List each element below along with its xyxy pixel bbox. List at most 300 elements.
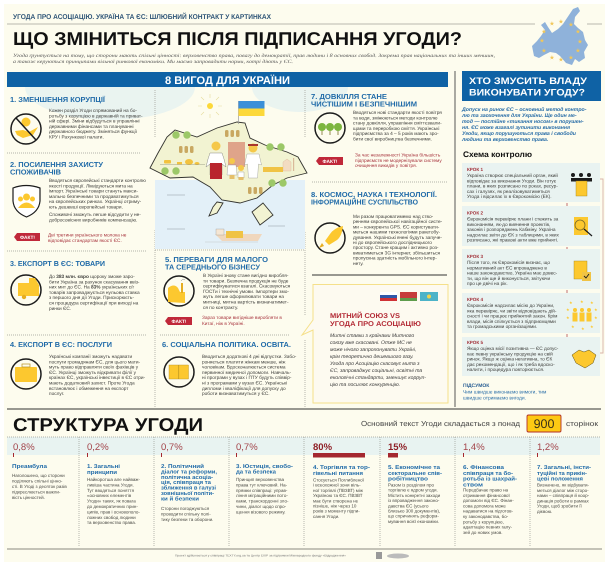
panel: step 3: про це двічі на рік. [467,281,508,287]
panel: benefit 3 goods export: ринки ЄС. [49,306,71,312]
panel: step 2: надсилає звіти до ЄК з таблицями, в яких [467,232,560,238]
intro: market access: ня. ЄС може взагалі зупинити виконання [462,125,570,131]
panel: benefit 7 environment: ЧИСТІШИМ І БЕЗПЕЧНІШИМ [311,100,417,108]
icon: shield with people [13,186,40,217]
panel: step 5: КРОК 5 [467,340,483,345]
callout: customs union vs association agreement: Митні ставки з країнами Митного [330,333,414,339]
column: final provisions: туційні та прикін- [537,470,587,477]
icon: magnifier [574,217,592,236]
icon: EU map with stars: ★ [558,18,564,26]
panel: benefit 2 consumers: Споживачі зможуть легше відсудити у не- [49,212,141,218]
panel: benefit 5 small business [164,255,291,327]
panel: benefit 8 space and science: ні до європейського дослідницького [353,240,432,246]
icon: briefcase [11,359,41,389]
column: final provisions: дієвою. [537,509,552,514]
panel: step 1: Угода і відсилає їх в Єврокомісію (ЕК). [467,194,552,200]
panel: step 2: виконанням, як-до вивчення проектів, [467,222,550,228]
intro: market access: людини та верховенство права. [461,137,548,143]
icon: sun [198,94,222,118]
column: economic cooperation: робітництво [388,476,429,483]
callout: 900 pages: Основний текст Угоди складається з понад [361,419,521,428]
column: trade: гівельні питання [313,470,363,477]
icon: people with stars [566,299,598,331]
callout: customs union vs association agreement: може нічого запропонувати Україні, [330,347,416,353]
column: justice: Принцип верховенства [236,477,284,482]
panel: benefit 8 space and science: ми – конкурента GPS. ЄС користувати- [353,224,440,230]
arrow [566,203,568,211]
panel: step 2: законів і розпоряджень Кабміну. Україна [467,227,556,233]
panel: benefit 4 services export: мають додатковий захист. Проте Угода [49,380,135,386]
panel: benefit 2 consumers: ють дешевші європейські товари. [49,204,123,210]
summary: ПІДСУМОК [463,383,490,389]
panel: benefit 4 services export: Українські компанії зможуть надавати [49,354,132,360]
callout: customs union vs association agreement: екологічні стандарти, зменшує корруп- [330,375,426,381]
column: financial cooperation: сова допомога може [463,503,506,508]
panel: benefit 4 services export: 4. ЕКСПОРТ В ЄС: ПОСЛУГИ [10,340,112,349]
panel: benefit 8 space and science: меться нашими технологіями ракетобу- [353,230,441,236]
panel: benefit 2 consumers: мально безпечними та продаватимуться [49,194,139,200]
column: final provisions: Угоди, щоб зробити її [537,504,582,509]
panel: step 4: яка перевіряє, чи звіти відповідають дій- [467,308,557,314]
panel: benefit 5 small business: митниці, митна вартість визначатимет- [203,300,289,306]
panel: benefit 2 consumers: 2. ПОСИЛЕННЯ ЗАХИСТУ [10,160,104,169]
panel: benefit 4 services export: країнах ЄС, українські інвестиції в ЄС отри- [49,375,146,381]
fact badge: ФАКТ! [172,319,187,325]
panel: benefit 6 social policy: роняється платити жінкам менше, ніж [202,359,286,365]
panel: benefit 1 corruption: Кожен розділ Угоди спрямований на бо- [49,108,137,114]
column: financial cooperation: ротьбу з корупцією, [463,519,504,524]
panel: benefit 7 environment [311,92,442,169]
panel: step 4: сності і чи працює прийнятий закон. Крім [467,314,557,320]
column: trade: ної торгівлі (ПВЗВТ) між [313,488,363,493]
panel: step 3 [462,249,600,289]
panel: step 4: Єврокомісія надсилає місію до України, [467,303,554,309]
panel: step 3: Після того, як Єврокомісія визнає, що [467,260,550,266]
column: preamble: Преамбула [12,463,48,470]
column: general principles: 0,2% [87,442,109,453]
icon: EU map with stars: ★ [541,48,547,54]
column: final provisions: цеві положення [537,476,583,483]
column: general principles: ципів, прав і основополо- [87,509,140,514]
icon: people with stars: ★ [594,315,598,320]
column: economic cooperation: близько 300 документів), [388,508,440,514]
icon: factory [263,158,294,172]
column: trade: Україною та ЄС. ПВЗВТ [313,493,363,498]
summary [463,383,547,402]
panel: step 2 [462,206,600,246]
panel: benefit 7 environment: За час незалежності Україна більшість [355,152,441,158]
icon: EU map with stars: ★ [568,22,574,28]
panel: benefit 7 environment: 7. ДОВКІЛЛЯ СТАНЕ [311,92,387,101]
column: political dialogue: ція, співпраця та [161,479,212,486]
fact badge: ФАКТ! [20,235,35,241]
panel: step 2: Єврокомісія перевіряє плани і стежить за [467,216,559,222]
column: trade: 4. Торгівля та тор- [313,464,370,471]
panel: benefit 7 environment: Вводяться нові стандарти якості повітря [353,110,442,116]
column: political dialogue: Сторони погоджуються [161,506,210,511]
column: economic cooperation: Разом із розділом про [388,482,434,488]
column: trade: і всеохожної зони віль- [313,483,361,488]
column: political dialogue: ки й безпеки [161,495,200,502]
column: final provisions: меться діалог між сторо- [537,488,589,493]
panel: benefit 6 social policy: дипломи і кваліфікації для допуску до [202,386,286,392]
decorative teal clouds [25,87,348,120]
column: financial cooperation: 1,4% [463,442,485,453]
intro text: а також керуються принципами вільної ринкової економіки. Ми маємо запровадити норми, котрі діють у ЄС. [13,59,293,65]
icon: handshake [572,350,596,368]
column: justice: права тут ключовий. На- [236,482,288,487]
column: financial cooperation: ку законодавства, бо- [463,514,509,519]
panel: benefit 2 consumers [10,160,146,244]
banner: 8 benefits [7,72,448,87]
panel: benefit 7 environment: та води, змінюються методи контролю [353,115,438,121]
column: preamble: Наголошено, що сторони [12,473,65,478]
panel: benefit 2 consumers: відповідає стандартам якості ЄС. [48,238,122,244]
panel: benefit 3 goods export: них мит до ЄС. На 83% українських с/г [49,286,134,291]
icon: EU map with stars: ★ [549,54,555,62]
column: financial cooperation: ством [463,482,483,488]
column: political dialogue [161,442,217,522]
column: preamble: сті. В Угоді з десяток разів [12,484,67,489]
column: justice [236,442,293,514]
callout: 900 pages [361,415,599,432]
column: justice: прямки співпраці: управ- [236,488,288,493]
panel: benefit 1 corruption: державними фінансами та плануванні [49,124,134,130]
panel: benefit 3 goods export: ся процедура сертифікації при виході на [49,300,139,306]
column: justice: да та безпека [236,468,277,476]
panel: benefit 8 space and science: нету. [353,262,364,267]
panel: benefit 6 social policy [162,340,297,397]
panel: benefit 2 consumers: СПОЖИВАЧІВ [10,168,61,176]
icon: factory [164,276,194,306]
icon: EU map with stars: ★ [558,56,564,64]
map illustration of Ukraine [150,94,307,249]
panel: step 1: Україна створює спеціальний орган, який [467,173,558,179]
icon: family [206,142,262,180]
panel: step 4: КРОК 4 [467,297,483,302]
column: economic cooperation: давства ЄС (усього [388,503,429,508]
panel: benefit 8 space and science: простору. Стане кращим і активно роз- [353,245,439,251]
column: financial cooperation: адаптацію певних галу- [463,525,513,530]
panel: step 5: дає рекомендації, що і як треба вдоско- [467,362,555,368]
panel: benefit 8 space and science [311,190,443,267]
column: general principles: та верховенство права. [87,520,136,525]
column: political dialogue: 2. Політичний [161,463,205,470]
panel: benefit 5 small business: 5. ПЕРЕВАГИ ДЛЯ МАЛОГО [165,255,268,264]
strip for percent row [7,437,600,455]
icon: people and document [571,173,592,196]
panel: step 3: КРОК 3 [467,254,483,259]
panel: benefit 4 services export: встановлює і обмеження на експорт [49,386,129,392]
panel: benefit 5 small business: сертифікуватися взагалі. Скасовуються [203,284,291,290]
column: trade: сання Угоди. [313,514,339,519]
panel: benefit 6 social policy: ні програми у вузах і ПТУ будуть співвір- [202,375,292,381]
panel: step 5: кає певну українську продукцію на свій [467,351,553,357]
column: justice: щення візового режиму. [236,509,286,514]
column: financial cooperation: допомоги від ЄС. Фінан- [463,498,514,503]
icon: EU map with stars: ★ [539,38,545,44]
icon: people with stars: ★ [580,299,584,304]
icon: people with stars: ★ [569,300,573,305]
callout: 900 pages: сторінок [566,419,599,428]
arrow [566,247,568,254]
panel: step 4: та громадськими організаціями. [467,324,537,330]
panel: step 1: КРОК 1 [467,167,483,172]
icon: EU map with stars: ★ [549,20,555,28]
panel: step 1: плани, в яких розписано по роках, ресур- [467,185,558,190]
title: ЩО ЗМІНИТЬСЯ ПІСЛЯ ПІДПИСАННЯ УГОДИ? [13,28,462,49]
icon: people with stars: ★ [581,326,585,331]
icon: EU map with stars: ★ [568,54,574,62]
icon: wheat [179,130,262,194]
icon: people with stars: ★ [566,307,570,312]
icon: book [164,357,194,387]
panel: benefit 8 space and science: ІНФОРМАЦІЙНЕ СУСПІЛЬСТВО [311,198,418,206]
arrow [566,334,568,342]
panel: benefit 8 space and science: виватиметься 3G інтернет, збільшиться [353,250,440,256]
panel: benefit 1 corruption: КРУ і Рахункової палати. [49,134,104,140]
panel: step 2: КРОК 2 [467,210,483,216]
waves [167,195,285,229]
column: political dialogue: діалог та реформи, [161,468,217,475]
column: final provisions: динація роботи в рамках [537,498,590,503]
panel: benefit 6 social policy: 6. СОЦІАЛЬНА ПОЛІТИКА. ОСВІТА. [162,340,291,349]
column: general principles: Угоди» таких, як повага [87,499,136,504]
panel: benefit 1 corruption: ротьбу з корупцією в державній та приват- [49,113,143,119]
panel: benefit 4 services export: муть право відправляти своїх фахівців у [49,365,139,371]
icon: people with stars: ★ [590,324,594,329]
panel: benefit 8 space and science: пропускна здатність мобільного інтер- [353,256,437,262]
panel: benefit 1 corruption: державного бюджету. Зміняться функції [49,129,138,135]
panel: benefit 6 social policy: первинної медичної допомоги. Навчаль- [202,370,291,376]
flags [380,292,438,301]
panel: benefit 4 services export: послуг. [49,392,64,397]
column: trade: має бути створена не [313,498,359,503]
icon: trees [161,131,287,187]
column: financial cooperation: отримання фінансової [463,493,511,498]
column: financial cooperation: ротьба із шахрай- [463,476,517,483]
column: financial cooperation: 6. Фінансова [463,464,505,471]
column: justice: 0,7% [236,442,258,453]
column: preamble: вість цінностей. [12,495,45,500]
icon: people with stars: ★ [566,315,570,320]
intro: market access: лю та заохочення для України. Ще один ме- [461,113,577,119]
icon: EU map with stars [532,7,588,65]
panel: benefit 2 consumers: добросовісних виробників компенсацію. [49,217,137,223]
callout: customs union vs association agreement: ЄС, запроваджує соціальні, освітні та [330,368,422,374]
panel: benefit 3 goods export: бити Україна за рахунок скасування ввіз- [49,279,140,285]
icon: document with check [574,261,591,281]
column: economic cooperation: торгівлю є ядром угоди. [388,488,438,493]
icon: cargo ship [205,229,262,242]
column: final provisions [537,442,591,514]
panel: benefit 2 consumers: якості продукції. Ліквідуються мита на [49,183,133,189]
footer credit [175,552,409,559]
fact badge: ФАКТ! [322,159,338,165]
callout: customs union vs association agreement: УГОДА ПРО АСОЦІАЦІЮ [330,321,421,328]
icon: people with stars: ★ [590,300,594,305]
panel: benefit 4 services export [10,340,146,397]
banner: who will force the authorities: ВИКОНУВАТИ УГОДУ? [469,88,585,98]
column: general principles: ливіша частина Угоди. [87,482,134,487]
panel: step 1: відповідає за виконання Угоди. Він готує [467,178,557,184]
column: preamble [12,442,67,500]
callout: customs union vs association agreement: крім теоретично дешевшого газу. [330,354,414,360]
panel: benefit 3 goods export: 3. ЕКСПОРТ В ЄС: ТОВАРИ [10,259,105,268]
panel: benefit 5 small business: ГОСТи і технічні умови. Імпортери змо- [203,289,289,295]
heading: control scheme: Схема контролю [463,150,532,159]
column: justice: ління міграційними пото- [236,493,288,498]
panel: benefit 7 environment: очищення викидів у повітря. [355,163,417,169]
icon: building [228,142,245,167]
panel: benefit 6 social policy: чоловікам. Вдосконалюється система [202,365,286,371]
column: trade: 80% [313,442,333,453]
column: final provisions: Визначено, як відбувати- [537,482,590,488]
panel: step 5: налити, і процедура повторюється. [467,367,544,373]
panel: benefit 5 small business: Китаї, ніж в Україні. [202,321,245,327]
panel: benefit 3 goods export: з першого дня дії Угоди. Прискорюєть- [49,295,134,301]
column: financial cooperation: зей до нових умов. [463,530,502,535]
panel: benefit 4 services export: послуги громадянам ЄС, для цього мати- [49,359,141,365]
column: preamble: підкреслюється важли- [12,490,61,494]
column: financial cooperation: співпраця та бо- [463,470,513,477]
panel: benefit 3 goods export: товарів запроваджується нульова ставка [49,290,140,296]
icon: bribe crossed [11,114,41,144]
panel: benefit 6 social policy: Вводиться додаткові 4 дні відпустки. Забо- [202,354,297,360]
column: justice: 3. Юстиція, свобо- [236,463,293,470]
column: justice: ками, транскордонні зло- [236,499,289,504]
panel: benefit 5 small business: жуть легше оформлювати товари на [203,294,284,300]
panel: benefit 1 corruption: 1. ЗМЕНШЕННЯ КОРУПЦІЇ [10,95,106,104]
icon: Ukrainian flag [238,101,264,124]
callout: customs union vs association agreement [302,284,448,403]
icon: trees [315,113,345,143]
column: economic cooperation: що спричинять реформ- [388,514,439,519]
panel: benefit 2 consumers: на європейських ринках. Українці отриму- [49,199,142,205]
callout: customs union vs association agreement: союзу вже скасовані. Отже МС не [330,340,412,346]
panel: step 5 [462,337,600,376]
panel: benefit 7 environment: стану довкілля, управління сміттєзвали- [353,121,442,127]
column: economic cooperation: із впровадження законо- [388,498,440,503]
column: trade: Стосується Поглибленої [313,478,365,482]
icon: people with stars: ★ [594,307,598,312]
column: political dialogue: 0,7% [161,442,183,453]
panel: step 1: сах і галузях, як реалізовуватиметься [467,189,550,195]
banner: who will force the authorities [462,71,601,101]
panel: benefit 7 environment: бити свої виробництва безпечними. [353,136,432,142]
panel: benefit 3 goods export: До 383 млн. євро щороку зможе заро- [49,275,135,280]
column: economic cooperation: 5. Економічне та [388,464,441,471]
column: trade: років з моменту підпи- [313,509,360,514]
feedback line [600,179,603,353]
column: political dialogue: зовнішньої політи- [161,490,214,497]
panel: step 3: нормативний акт ЄС впроваджено в [467,265,547,271]
panel: benefit 3 goods export [10,259,140,312]
column: general principles: Найкоротша але найваж- [87,477,140,482]
panel: benefit 2 consumers: імпорт. Українські товари стануть макси- [49,189,138,195]
callout: customs union vs association agreement: МИТНИЙ СОЮЗ VS [330,311,400,320]
icon: truck [11,275,41,305]
heading: agreement structure: СТРУКТУРА УГОДИ [13,414,203,435]
column: preamble: поділяють спільні цінно- [12,478,63,484]
summary: Чим швидше виконаємо вимоги, тим [463,390,547,396]
column: financial cooperation: Передбачає право на [463,488,509,492]
panel: benefit 7 environment: щами та переробкою сміття. Українські [353,126,439,132]
panel: benefit 5 small business: Зараз товари вигідніше виробляти в [202,315,282,321]
column: final provisions: нами – співпраця й коор- [537,493,590,498]
icon: EU map with stars: ★ [575,48,581,54]
intro text: Угода ґрунтується на тому, що сторони мають спільні цінності: верховенство права, повагу до демократії, прав людини і 8 основних свобод. Зокрема прав національних та інших меншин, [13,53,495,59]
panel: step 3: ти, що він ще й виконується, звітуючи [467,276,550,282]
column: political dialogue: політична асоціа- [161,474,213,481]
column: financial cooperation: надаватися на підготов- [463,509,514,514]
panel: step 4 [462,293,600,333]
panel: benefit 2 consumers: Дві третини українського молока не [48,232,127,238]
banner: 8 benefits: 8 ВИГОД ДЛЯ УКРАЇНИ [165,74,290,87]
panel: benefit 5 small business: ТА СЕРЕДНЬОГО БІЗНЕСУ [165,262,261,272]
column: trade: пізніше, ніж через 10 [313,504,357,508]
column: general principles: принципи [87,470,118,476]
panel: benefit 7 environment: підприємств не модернізували систему [355,158,442,164]
column: general principles: до демократичних прин- [87,504,138,509]
panel: benefit 2 consumers: Вводяться європейські стандарти контролю [49,178,146,184]
icon: EU map with stars: ★ [577,38,583,46]
intro: market access: Допуск на ринок ЄС – основний метод контро- [461,107,587,113]
panel: benefit 5 small business: ся по контракту. [203,306,238,311]
panel: benefit 1 corruption [10,95,143,144]
header kicker: УГОДА ПРО АСОЦІАЦІЮ. УКРАЇНА ТА ЄС: ШЛЮБНИЙ КОНТРАКТ У КАРТИНКАХ [13,12,271,21]
panel: benefit 5 small business: ти товари. Безпечна продукція не буде [203,278,289,284]
icon: EU map with stars: ★ [541,28,547,36]
column: economic cooperation: мування всієї економіки. [388,519,439,524]
column: political dialogue: тику безпеки та оборони. [161,517,213,522]
column: general principles: Тут вводяться поняття [87,488,135,493]
panel: step 5: Якщо оцінка місії позитивна — ЄС допус- [467,346,559,352]
column: justice: чини, діалог щодо спро- [236,504,287,509]
panel: step 4: влади, місія спілкується з підприємцями [467,319,556,325]
panel: step 3: наше законодавство, Україна має довес- [467,271,558,277]
column: preamble: 0,8% [13,442,35,453]
summary: швидше отримаємо вигоди. [463,396,526,402]
panel: benefit 6 social policy: роботи визнаватимуться у ЄС. [202,391,270,397]
panel: benefit 4 services export: ЄС. Українці зможуть відкривати філії у [49,370,137,376]
banner: who will force the authorities: ХТО ЗМУСИТЬ ВЛАДУ [469,76,587,87]
column: general principles: 1. Загальні [87,463,120,470]
icon: EU map with stars: ★ [575,28,581,36]
column: trade [313,442,370,519]
panel: benefit 5 small business: В Україні знову стане вигідно виробля- [203,273,289,279]
intro: market access: тод — постійне «тикання носом» в порушен- [462,119,584,125]
column: final provisions: 7. Загальні, інсти- [537,464,591,471]
column: general principles [87,442,140,525]
column: economic cooperation [388,442,442,524]
panel: step 2: розписано, які правові акти вже прийняті. [467,238,558,244]
callout: 900 pages: 900 [534,417,554,431]
icon: rocket [315,223,345,253]
column: economic cooperation: секторальне спів- [388,470,442,477]
arrow [566,290,568,298]
callout: customs union vs association agreement: Угода про Асоціацію скасовує мита з [330,361,420,367]
footer credit: Проект здійснюється у співпраці TEXTY.org.ua та Центр ЕКІР за підтримки Міжнародного фонду «Відродження» [175,554,346,558]
column: general principles: ложних свобод людини [87,515,136,520]
panel: benefit 1 corruption: ній сфері. Зміни відбудуться в управлінні [49,119,140,125]
icon: farm and hay [160,159,205,165]
panel: benefit 6 social policy: ні з програмами у вузах ЄС. Українські [202,380,287,386]
panel: benefit 8 space and science: ренням європейської навігаційної систе- [353,219,443,225]
panel: benefit 7 environment: підприємства за 4 – 5 років мають зро- [353,131,439,137]
column: financial cooperation [463,442,517,535]
intro: market access: Угоди, якщо порушуються права і свободи [462,131,577,137]
